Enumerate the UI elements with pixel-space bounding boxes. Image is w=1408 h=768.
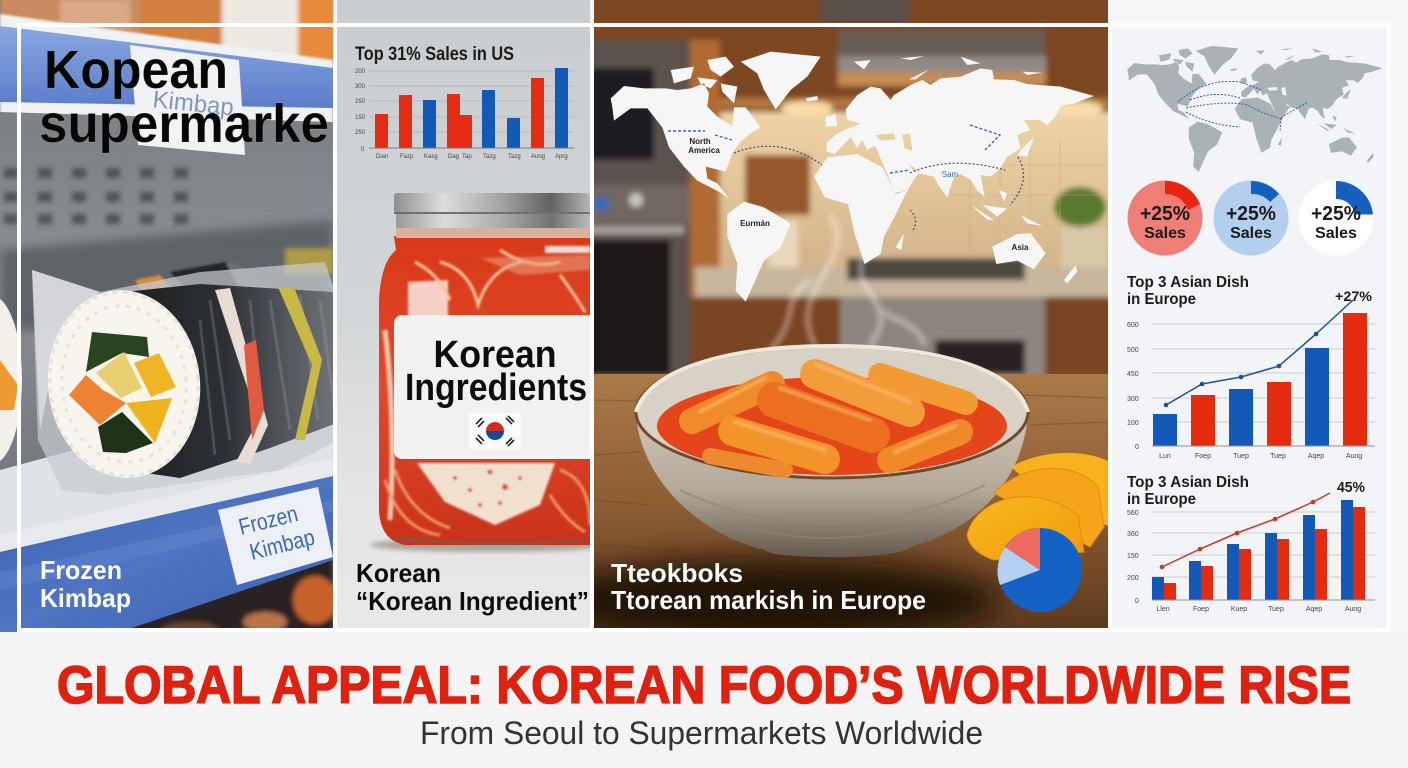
counter	[695, 267, 1120, 297]
band red	[215, 288, 268, 464]
bar chart A with line: 300	[1127, 396, 1139, 403]
bar chart: US sales: Tazg	[483, 154, 496, 160]
filling: pale yellow	[96, 352, 142, 398]
subtitle: From Seoul to Supermarkets Worldwide	[420, 715, 983, 751]
pickled radish slices	[967, 453, 1112, 560]
plastic wrap	[32, 262, 333, 495]
chart title: Top 31% Sales in US	[355, 44, 514, 65]
grouped bar chart B with line: 45%	[1337, 479, 1365, 496]
freezer basket holes	[4, 168, 188, 224]
bar chart: US sales: Fazp	[400, 154, 414, 160]
panel: frozen kimbap supermarket	[0, 0, 333, 632]
bar chart A with line	[1127, 288, 1375, 460]
kimbap roll	[32, 262, 333, 495]
donut: light blue +25% Sales: Sales	[1230, 225, 1272, 242]
steam	[770, 215, 925, 350]
grouped bar chart B with line: Aqep	[1306, 606, 1322, 613]
bar chart: US sales: 250	[355, 130, 366, 136]
rice	[48, 290, 200, 478]
donut: light blue +25% Sales: +25%	[1226, 203, 1276, 225]
heading: chart B: Top 3 Asian Dish	[1127, 474, 1249, 491]
frozen food top shelf	[0, 0, 338, 65]
caption: Tteokboks	[611, 558, 926, 615]
white frame lines	[19, 25, 1389, 630]
bar chart A with line: 600	[1127, 322, 1139, 329]
pie chart	[998, 528, 1082, 612]
panel: tteokbokki and world map	[594, 0, 1108, 628]
bar chart: US sales: 200	[355, 69, 366, 75]
bar chart: US sales: 0	[361, 147, 365, 153]
band yellow	[278, 287, 322, 440]
rice cakes	[692, 374, 966, 470]
background kimbap	[134, 261, 244, 290]
grouped bar chart B with line: 360	[1127, 531, 1139, 538]
jar label	[394, 315, 604, 459]
blue price rail	[0, 12, 333, 122]
jar label: Ingredients	[405, 367, 587, 409]
grouped bar chart B with line: 560	[1127, 510, 1139, 517]
tile lines	[950, 140, 1108, 258]
map labels: America	[688, 146, 720, 155]
utensil crock	[745, 155, 810, 215]
grouped bar chart B with line: 0	[1135, 598, 1139, 605]
shelf tag: Frozen Kimbap: Frozen	[236, 500, 300, 540]
caption: Frozen Kimbap: Kimbap	[40, 583, 131, 613]
bar chart A with line: Tuep	[1233, 453, 1249, 460]
jar lid	[394, 193, 590, 213]
bar chart: US sales: Dag	[448, 154, 459, 160]
grouped bar chart B with line: Tuep	[1268, 606, 1284, 613]
jar body	[379, 236, 600, 545]
panel: global data charts	[1112, 27, 1387, 628]
heading: Kopean supermarke	[40, 50, 328, 154]
wooden table	[594, 374, 1108, 628]
jar glass base	[392, 538, 590, 544]
grouped bar chart B with line: Aung	[1345, 606, 1361, 613]
heading: chart A: Top 3 Asian Dish	[1127, 274, 1249, 291]
bar chart A with line: Foep	[1195, 453, 1211, 460]
filling: yellow right	[134, 353, 176, 397]
lower cabinets	[690, 297, 840, 382]
heading: chart B: in Europe	[1127, 491, 1196, 508]
bar chart: US sales: 300	[355, 84, 366, 90]
bowl shadow and caption backdrop	[540, 558, 1000, 642]
grouped bar chart B with line: 150	[1127, 553, 1139, 560]
nori body	[125, 284, 345, 478]
bar chart A with line: Tuep	[1270, 453, 1286, 460]
grouped bar chart B with line: Llen	[1156, 606, 1170, 613]
caption: Korean Ingredient: “Korean Ingredient”	[356, 586, 589, 616]
plant	[1054, 187, 1106, 227]
bar chart: US sales: Tap	[462, 154, 472, 160]
donut: white +25% Sales: Sales	[1315, 225, 1357, 242]
rail tag: Kimbap	[130, 45, 245, 155]
map labels	[688, 137, 1029, 252]
footer band	[0, 632, 1408, 768]
bar chart: US sales: 150	[355, 115, 366, 121]
map labels: Asia	[1012, 243, 1029, 252]
filling: orange	[69, 375, 126, 425]
world map	[611, 52, 1094, 302]
blue shelf strip	[0, 458, 333, 632]
jar label: Korean	[434, 334, 556, 376]
map labels: Eurmán	[740, 219, 770, 228]
bar chart A with line: 0	[1135, 444, 1139, 451]
shelf surface	[0, 424, 333, 535]
bar chart A with line: Aqep	[1308, 453, 1324, 460]
bar chart A with line: +27%	[1335, 288, 1373, 304]
donut: light blue +25% Sales	[1214, 180, 1288, 256]
heading: Kopean supermarke: supermarke	[39, 94, 329, 154]
dark food under shelf	[132, 560, 333, 628]
heading: chart A: in Europe	[1127, 291, 1196, 308]
grouped bar chart B with line: Kuep	[1231, 606, 1247, 613]
bar chart: US sales: Kasg	[424, 154, 438, 160]
grey world map with routes	[1127, 46, 1382, 172]
bar chart: US sales: Aung	[531, 154, 545, 160]
caption: Korean Ingredient: Korean	[356, 558, 441, 588]
bar chart A with line: 100	[1127, 420, 1139, 427]
cabbage below label	[417, 463, 555, 525]
caption: Frozen Kimbap: Frozen	[40, 555, 122, 585]
shelf tag: Frozen Kimbap: Kimbap	[247, 524, 317, 565]
rail tag: Kimbap: Kimbap	[151, 86, 235, 121]
route lines	[734, 146, 1023, 232]
grouped bar chart B with line	[1127, 479, 1375, 613]
jar of kimchi	[370, 193, 610, 552]
neighbouring kimbap at left	[0, 296, 22, 464]
panel: Korean ingredients jar	[337, 0, 610, 628]
bar chart: US sales: Tazg	[508, 154, 521, 160]
filling: green top	[86, 332, 149, 372]
bar chart: US sales: Dian	[376, 154, 388, 160]
caption: Tteokboks: Ttorean markish in Europe	[611, 585, 926, 615]
bar chart: US sales	[355, 68, 574, 160]
filling: yellow bottom	[126, 398, 172, 443]
bowl	[636, 346, 1028, 557]
grouped bar chart B with line: 200	[1127, 575, 1139, 582]
grouped bar chart B with line: Foep	[1193, 606, 1209, 613]
sauce	[657, 377, 1007, 475]
blurred kitchen background	[580, 0, 1120, 385]
donut: red +25% Sales: +25%	[1140, 203, 1190, 225]
shelf tag: Frozen Kimbap	[218, 487, 333, 585]
cabbage streaks	[385, 246, 590, 535]
donut: red +25% Sales: Sales	[1144, 225, 1186, 242]
basket shadow	[0, 220, 333, 330]
bar chart A with line: 450	[1127, 371, 1139, 378]
icon: Korean flag	[469, 413, 521, 449]
donut: red +25% Sales	[1128, 180, 1202, 256]
map labels: North	[689, 137, 711, 146]
jar neck	[396, 228, 590, 238]
heading: Kopean supermarke: Kopean	[44, 40, 228, 100]
bar chart A with line: Lun	[1159, 453, 1171, 460]
bar chart A with line: Aung	[1346, 453, 1362, 460]
map labels: Sam	[942, 170, 959, 179]
donut: white +25% Sales: +25%	[1311, 203, 1361, 225]
caption: Tteokboks: Tteokboks	[611, 558, 743, 588]
bar chart: US sales: Aprg	[555, 154, 568, 160]
bar chart A with line: 500	[1127, 347, 1139, 354]
filling: green bottom	[98, 412, 153, 453]
donut: white +25% Sales	[1298, 180, 1374, 256]
bar chart: US sales: 250	[355, 99, 366, 105]
left oven column	[580, 40, 690, 385]
